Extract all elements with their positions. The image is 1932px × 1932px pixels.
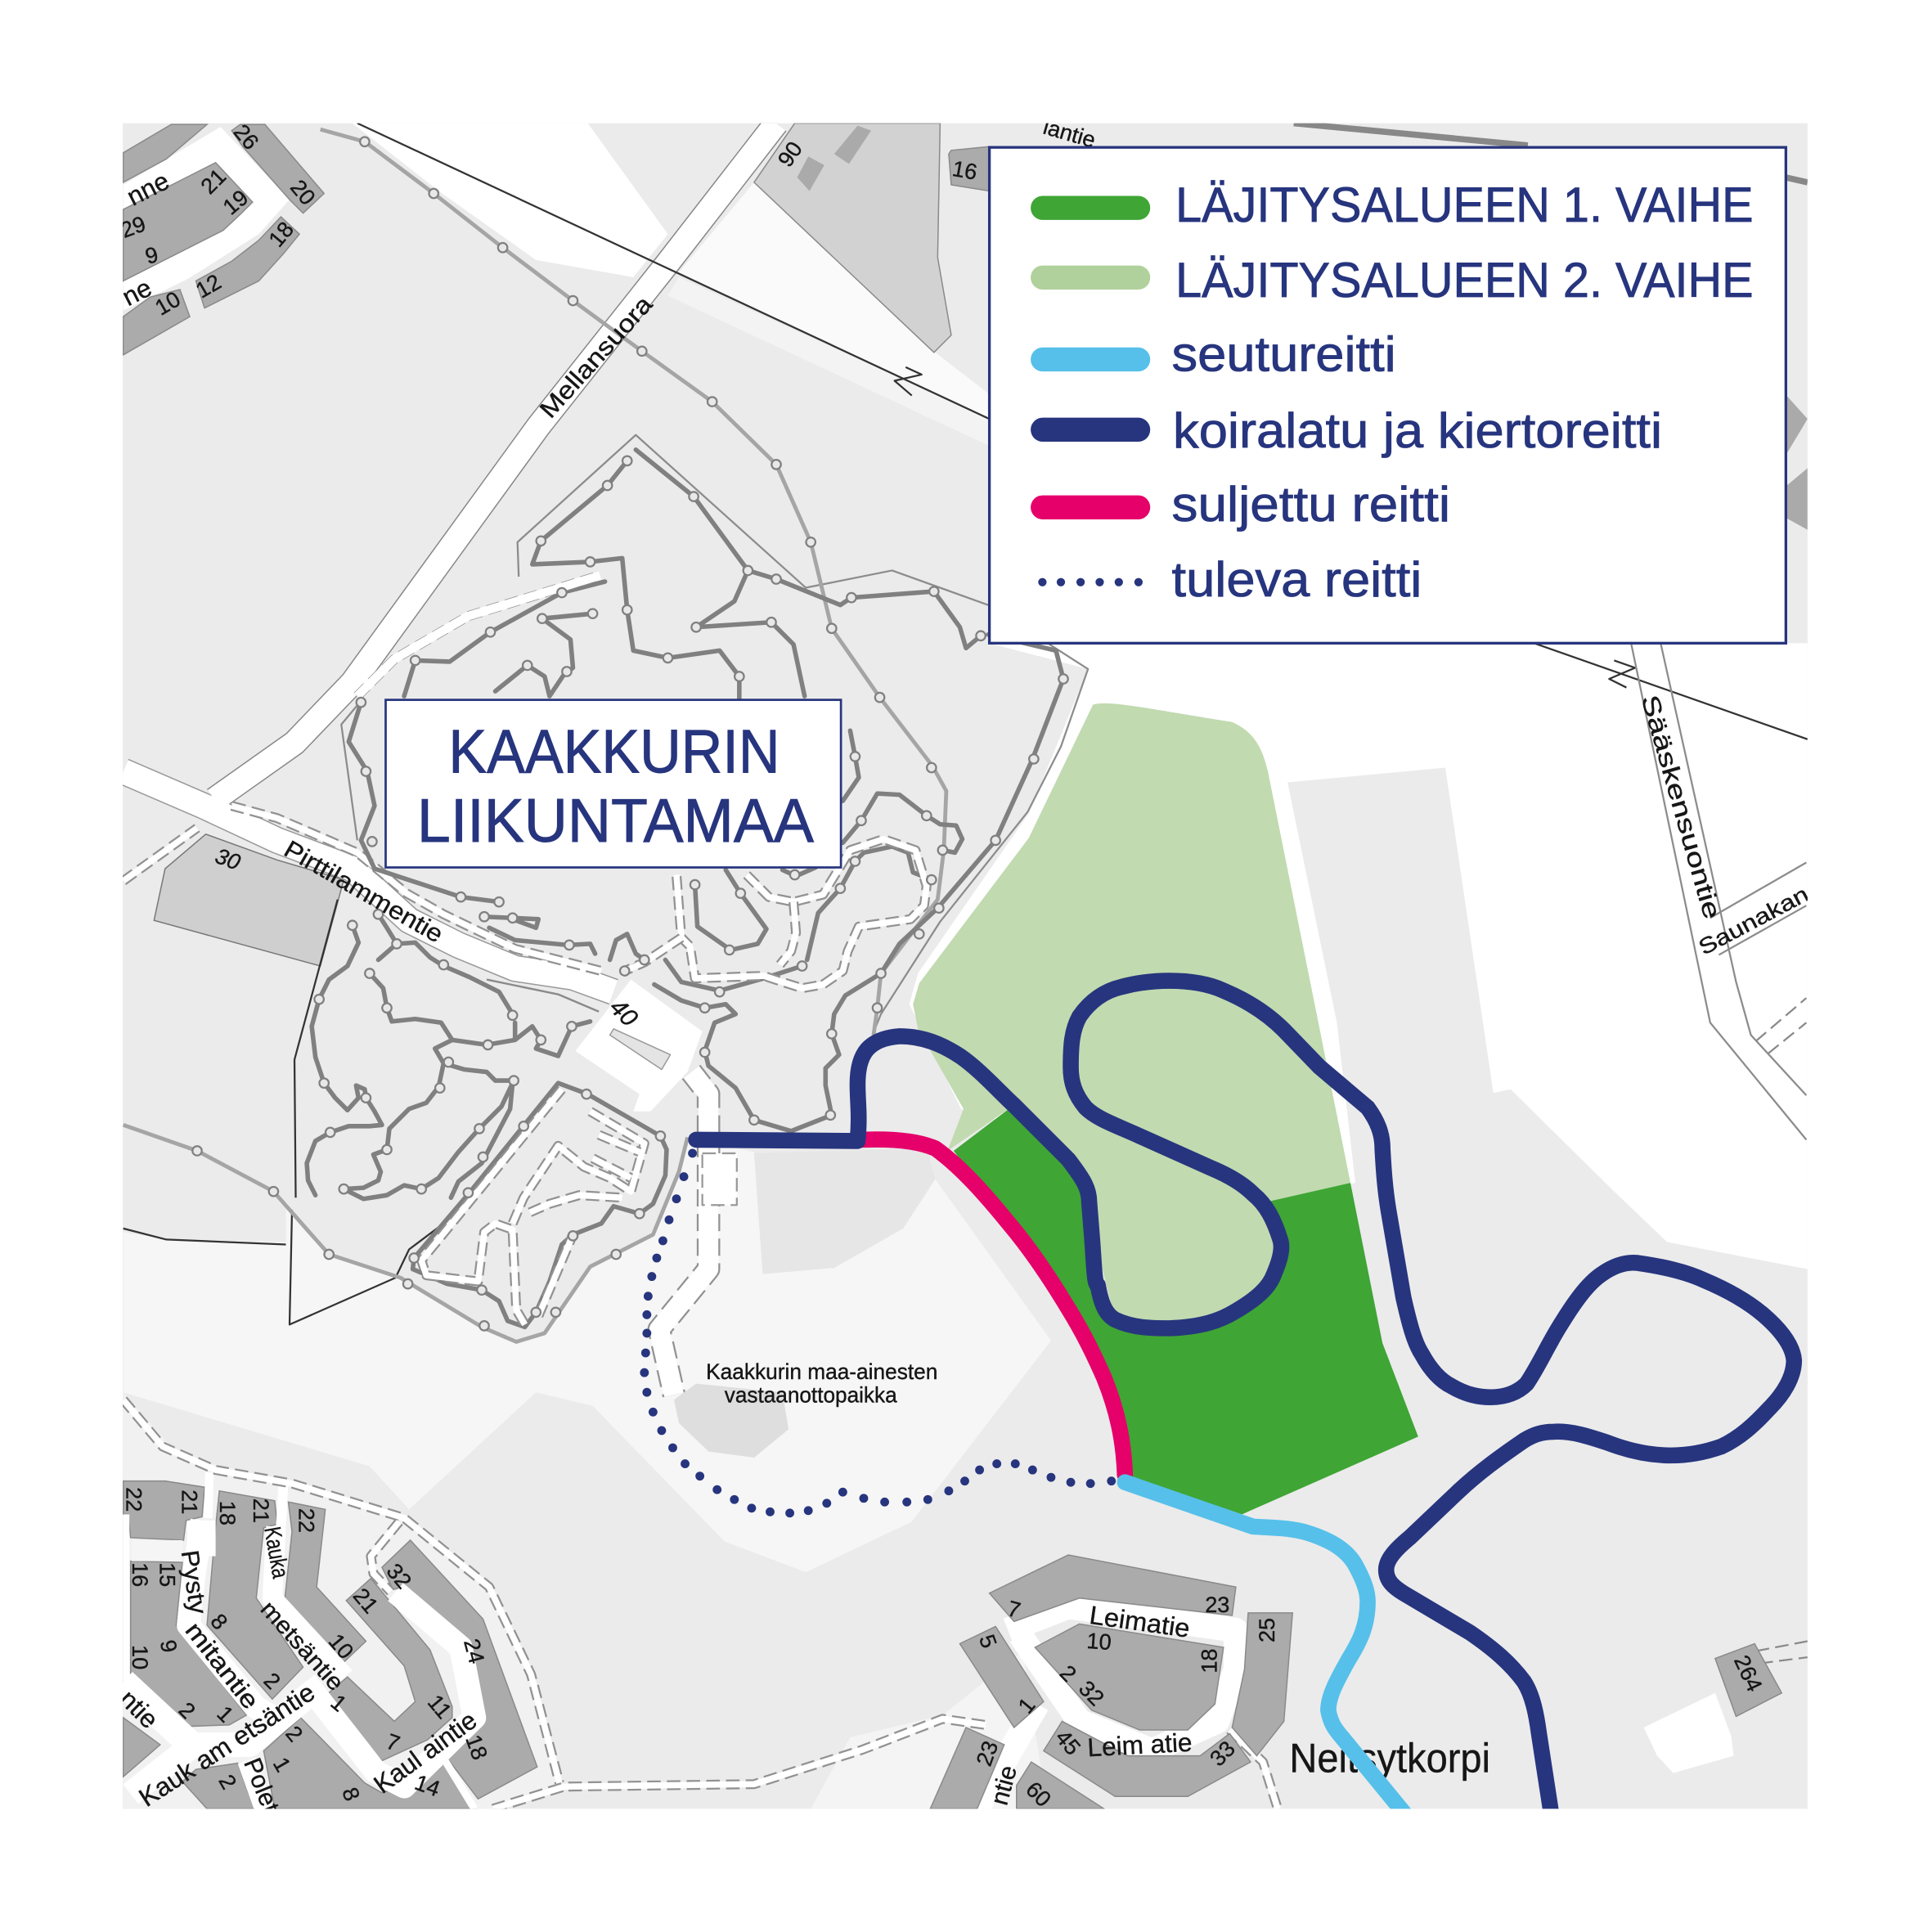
- place labels on map: 1: [212, 1701, 239, 1728]
- place labels on map: Kaul aintie: [368, 1705, 482, 1799]
- east small gray plot: [754, 1148, 935, 1274]
- place labels on map: 7: [1004, 1595, 1023, 1623]
- place labels on map: 21: [195, 164, 231, 199]
- place labels on map: 14: [411, 1769, 443, 1801]
- place labels on map: 22: [122, 1487, 147, 1512]
- place labels on map: 26: [229, 119, 264, 155]
- place labels on map: 2: [281, 1721, 308, 1746]
- legend: closed route: suljettu reitti: [1172, 476, 1450, 532]
- place labels on map: 90: [772, 137, 807, 172]
- place labels on map: 18: [215, 1501, 240, 1525]
- place labels on map: 8: [337, 1784, 365, 1804]
- place labels on map: 10: [128, 1645, 153, 1669]
- place labels on map: 1: [326, 1689, 352, 1717]
- legend: regional route: seutureitti: [1172, 326, 1396, 381]
- place labels on map: 2: [259, 1667, 285, 1694]
- place labels on map: 12: [191, 269, 225, 303]
- route: regional route (light blue): [1125, 1482, 1404, 1813]
- top-right edge strips: [1294, 124, 1808, 530]
- place labels on map: 21: [348, 1583, 384, 1618]
- top-left residential blocks: [124, 124, 324, 355]
- title text: KAAKKURIN: [448, 717, 780, 785]
- place labels on map: 2: [213, 1770, 242, 1794]
- Leimatie blocks: [930, 146, 1781, 1808]
- title text: LIIKUNTAMAA: [417, 786, 815, 855]
- place labels on map: Sääskensuontie: [1636, 692, 1726, 922]
- route: dog ski track and detour (navy): [696, 981, 1794, 1813]
- place labels on map: 1: [268, 1753, 296, 1776]
- place labels on map: 32: [1074, 1675, 1109, 1710]
- place labels on map: 33: [1205, 1736, 1240, 1771]
- phase 2 area (light green): [913, 703, 1350, 1331]
- legend: regional route: [1031, 326, 1396, 381]
- place labels on map: 7: [383, 1728, 403, 1756]
- place labels on map: 16: [950, 155, 979, 185]
- legend: phase 2: LÄJITYSALUEEN 2. VAIHE: [1175, 252, 1754, 308]
- place labels on map: Leim atie: [1087, 1728, 1193, 1762]
- Leimatie street: [977, 1606, 1236, 1808]
- place labels on map: 10: [324, 1629, 359, 1664]
- place labels on map: 18: [461, 1732, 493, 1764]
- place labels on map: nne: [122, 165, 173, 211]
- place labels on map: 19: [218, 184, 253, 220]
- place labels on map: 21: [249, 1498, 274, 1523]
- place labels on map: 18: [263, 217, 299, 252]
- place labels on map: Leimatie: [1088, 1600, 1192, 1643]
- long gravel trail: [124, 129, 946, 1341]
- legend panel: [990, 147, 1786, 643]
- place labels on map: mitantie: [180, 1617, 264, 1714]
- place labels on map: 264: [1729, 1651, 1768, 1696]
- place labels on map: 40: [604, 994, 643, 1032]
- reception site pond: [674, 1384, 789, 1458]
- place labels on map: iantie: [1040, 114, 1099, 153]
- eastern road: [1631, 645, 1808, 1664]
- bottom-left streets: [124, 1472, 474, 1808]
- legend: future route: tuleva reitti: [1172, 551, 1422, 607]
- place labels on map: 2: [1055, 1660, 1081, 1687]
- place labels on map: 29: [117, 210, 149, 243]
- place labels on map: Saunakan: [1694, 881, 1813, 960]
- place labels on map: 5: [974, 1631, 1002, 1651]
- place labels on map: ntie: [114, 1684, 164, 1734]
- place labels on map: 30: [212, 842, 244, 875]
- place labels on map: 15: [155, 1562, 180, 1587]
- place labels on map: Neitsytkorpi: [1289, 1736, 1490, 1781]
- route: future path (dotted navy): [640, 1149, 1116, 1517]
- place labels on map: ntie: [986, 1763, 1022, 1808]
- place labels on map: ne: [117, 272, 156, 312]
- place labels on map: 45: [1050, 1725, 1086, 1760]
- place labels on map: Kauka: [258, 1525, 294, 1580]
- trail nodes: [192, 137, 1068, 1331]
- title box: [385, 700, 841, 867]
- legend: dog ski track: koiralatu ja kiertoreitti: [1173, 402, 1662, 458]
- base map: [114, 114, 1813, 1817]
- building 90 area: [754, 124, 951, 353]
- place labels on map: 32: [382, 1558, 417, 1593]
- park trails: [307, 450, 1063, 1327]
- place labels on map: 11: [423, 1690, 457, 1723]
- place labels on map: Kaakkurin maa-ainesten: [706, 1359, 937, 1384]
- place labels on map: 25: [1254, 1618, 1279, 1642]
- place labels on map: 10: [1086, 1628, 1112, 1655]
- place labels on map: 21: [177, 1489, 202, 1514]
- legend: future route: [1038, 551, 1422, 607]
- place labels on map: 22: [294, 1508, 320, 1533]
- place labels on map: 24: [459, 1636, 490, 1666]
- park outline: [341, 435, 1088, 1035]
- place labels on map: Pirttilammentie: [280, 836, 447, 949]
- place labels on map: 1: [1013, 1692, 1040, 1719]
- place labels on map: [114, 114, 1813, 1817]
- main roads: [124, 124, 776, 1395]
- place labels on map: metsäntie: [255, 1596, 348, 1696]
- legend: closed route: [1031, 476, 1450, 532]
- place labels on map: 23: [971, 1737, 1003, 1769]
- place labels on map: 16: [128, 1562, 153, 1587]
- place labels on map: 60: [1021, 1777, 1056, 1812]
- place labels on map: Mellansuora: [535, 291, 658, 424]
- black boundary lines: [124, 124, 1808, 1324]
- place labels on map: 23: [1205, 1592, 1229, 1617]
- dashed residential roads: [124, 1400, 1278, 1808]
- map background areas: [122, 124, 1808, 1810]
- bottom-left residential blocks: [124, 1481, 537, 1808]
- phase 1 area (dark green): [954, 1108, 1418, 1514]
- top-left street: [124, 127, 290, 311]
- legend: phase 1: LÄJITYSALUEEN 1. VAIHE: [1175, 177, 1754, 232]
- place labels on map: 9: [142, 241, 161, 269]
- white dashed paths in park: [357, 575, 927, 1324]
- place labels on map: 20: [285, 174, 321, 210]
- building 30 plot: [154, 834, 344, 966]
- place labels on map: 2: [174, 1697, 200, 1723]
- place labels on map: Polet: [238, 1755, 285, 1817]
- place labels on map: vastaanottopaikka: [725, 1382, 898, 1408]
- place labels on map: 8: [205, 1609, 233, 1634]
- place labels on map: 18: [1196, 1649, 1221, 1674]
- route: closed path (pink): [862, 1139, 1125, 1475]
- place labels on map: 10: [151, 286, 185, 321]
- place labels on map: 9: [155, 1638, 182, 1655]
- place labels on map: Pysty: [176, 1548, 211, 1615]
- place labels on map: Kauk am etsäntie: [133, 1677, 320, 1813]
